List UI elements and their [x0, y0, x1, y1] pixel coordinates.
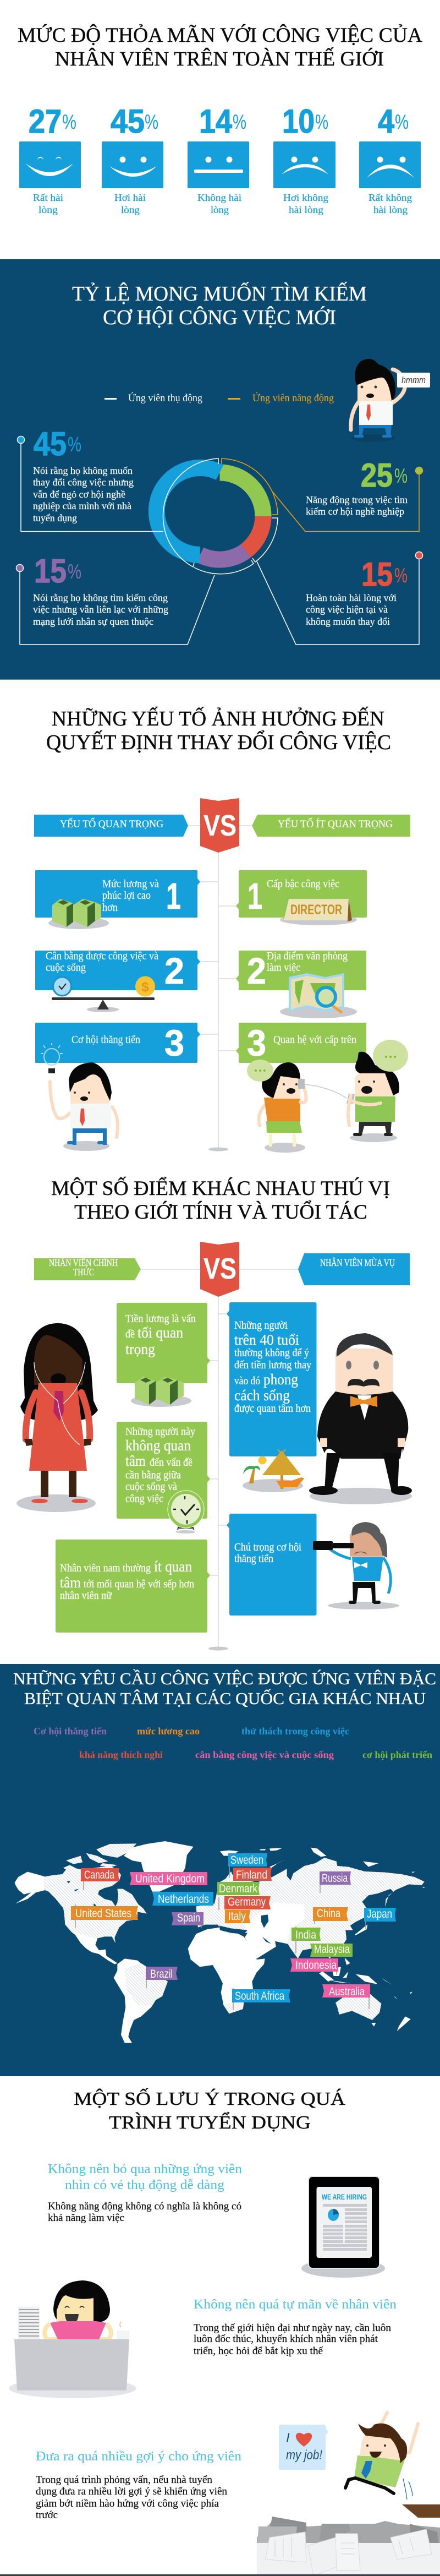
note: complacency: Không nên quá tự mãn về nhân viên: [194, 2297, 397, 2312]
legend: requirements: thử thách trong công việc: [241, 1726, 349, 1737]
icon: speech bubble I love my job: [279, 2425, 328, 2470]
card: men care less about boss: nhân viên nữ: [60, 1590, 112, 1602]
banner: less important factors: YẾU TỐ ÍT QUAN TRỌNG: [278, 818, 393, 830]
flag: India: India: [295, 1929, 316, 1941]
card: not caring about balance: [117, 1422, 210, 1533]
flag: Netherlands: Netherlands: [158, 1893, 209, 1906]
icon: woman with earphones: [16, 1323, 98, 1512]
title: differences: THEO GIỚI TÍNH VÀ TUỔI TÁC: [74, 1200, 367, 1224]
legend: requirements: [34, 1726, 432, 1760]
note: complacency: luôn đốc thúc, khuyến khích nhân viên phát: [194, 2333, 378, 2345]
note: too many hints: giảm bớt niềm hào hứng với công việc phía: [36, 2498, 219, 2509]
callout: 15% satisfied: %: [394, 564, 408, 587]
stat: 10% somewhat unsatisfied: %: [315, 111, 328, 133]
callout: 15% satisfied: 15: [361, 556, 393, 593]
banner: less important factors: [252, 815, 410, 837]
stat: 14% not satisfied: Không hài: [197, 192, 241, 203]
callout: 15% passive network: Nói rằng họ không tìm kiếm công: [33, 592, 168, 603]
legend: requirements: mức lương cao: [137, 1726, 200, 1737]
banner: permanent staff: THỨC: [73, 1266, 94, 1278]
stat: 14% not satisfied: %: [233, 111, 246, 133]
callout: 25% active: 25: [361, 457, 393, 494]
icon: woman at desk: [9, 2280, 136, 2398]
icon: idea man: [41, 1043, 118, 1151]
title: requirements: BIỆT QUAN TÂM TẠI CÁC QUỐC GIA KHÁC NHAU: [24, 1688, 426, 1708]
stat: 10% somewhat unsatisfied: hài lòng: [289, 204, 323, 215]
card: not caring about balance: công việc: [125, 1493, 163, 1505]
callout: 15% passive network: [16, 553, 215, 645]
flag: Spain: [172, 1912, 204, 1925]
flag: Spain: Spain: [177, 1912, 200, 1924]
card: not caring about balance: không quan: [125, 1437, 191, 1454]
flag: Australia: Australia: [329, 1985, 365, 1998]
legend: requirements: cân bằng công việc và cuộc sống: [195, 1749, 334, 1760]
card: over 40: cách sống: [234, 1387, 290, 1404]
card: work life balance: 2: [164, 951, 184, 992]
legend: Ứng viên thụ động: [128, 392, 202, 404]
flag: Sweden: Sweden: [230, 1854, 263, 1866]
card: men care less about boss: tới mối quan hệ với sếp hơn: [84, 1578, 194, 1590]
flag: Denmark: Denmark: [219, 1882, 257, 1895]
callout: 25% active: [273, 457, 422, 532]
icon: VS ribbon: VS: [204, 1252, 237, 1285]
legend: requirements: cơ hội phát triển: [362, 1749, 432, 1760]
note: passive candidates: Không năng động không có nghĩa là không có: [48, 2201, 241, 2212]
card: promotion focus: [227, 1514, 317, 1616]
legend: Ứng viên năng động: [252, 392, 334, 404]
card: office location: Địa điểm văn phòng: [267, 950, 348, 962]
card: job level: Cấp bậc công việc: [267, 878, 339, 890]
card: work life balance: Cân bằng được công việc và: [46, 950, 158, 962]
callout: 15% satisfied: công việc hiện tại và: [306, 604, 388, 615]
card: relationship with boss: 3: [247, 1023, 266, 1064]
card: not caring about balance: tâm: [125, 1453, 146, 1469]
flag: Italy: Italy: [228, 1910, 246, 1923]
title: satisfaction: MỨC ĐỘ THỎA MÃN VỚI CÔNG VIỆC CỦA: [18, 23, 422, 47]
callout: 45% passive: tuyển dụng: [33, 512, 77, 523]
callout: 45% passive: %: [68, 433, 81, 456]
card: salary: phúc lợi cao: [102, 889, 151, 902]
panel: recruitment notes: [0, 2088, 440, 2576]
icon: man with telescope: [313, 1522, 399, 1609]
legend: requirements: Cơ hội thăng tiến: [34, 1726, 107, 1737]
stat: 27% very satisfied: [19, 103, 81, 215]
card: over 40: trên 40 tuổi: [234, 1331, 299, 1348]
icon: tablet hiring: WE ARE HIRING: [322, 2192, 367, 2201]
flag: Malaysia: Malaysia: [314, 1943, 350, 1956]
panel: desire for new job: [0, 259, 440, 680]
icon: tablet hiring: [301, 2176, 385, 2278]
icon: speech bubble I love my job: I: [286, 2431, 290, 2446]
card: work life balance: $: [141, 980, 150, 995]
note: too many hints: Trong quá trình phỏng vấn, nếu nhà tuyển: [36, 2474, 212, 2486]
card: salary most important: trọng: [125, 1341, 155, 1357]
card: office location: 2: [247, 951, 266, 992]
banner: seasonal staff: [298, 1253, 410, 1285]
card: not caring about balance: cần bằng giữa: [125, 1469, 181, 1481]
icon: VS ribbon: [200, 1242, 239, 1297]
callout: 15% satisfied: [257, 552, 422, 645]
card: men care less about boss: tâm: [60, 1574, 81, 1591]
card: salary most important: Tiền lương là vấn: [125, 1313, 196, 1325]
flag: South Africa: South Africa: [235, 1990, 284, 2002]
panel: job requirements by country: [0, 1664, 440, 2076]
stat: 27% very satisfied: 27: [29, 103, 62, 140]
card: promotion: [35, 1023, 200, 1064]
card: over 40: được quan tâm hơn: [234, 1402, 311, 1415]
title: satisfaction: [18, 23, 422, 70]
note: complacency: [194, 2297, 397, 2357]
card: over 40: [227, 1302, 317, 1456]
callout: 45% passive: thay đổi công việc nhưng: [33, 477, 134, 488]
stat: 14% not satisfied: 14: [199, 103, 233, 140]
icon: VS ribbon: VS: [204, 809, 237, 842]
card: salary: 1: [166, 876, 181, 917]
icon: man with mustache: [309, 1333, 412, 1504]
card: promotion: 3: [164, 1023, 184, 1064]
icon: beach: [243, 1449, 304, 1492]
stat: 10% somewhat unsatisfied: [273, 103, 336, 215]
card: men care less about boss: [56, 1540, 210, 1633]
chart: donut: [157, 459, 278, 574]
stat: 10% somewhat unsatisfied: Hơi không: [283, 192, 328, 203]
callout: 15% passive network: 15: [34, 553, 67, 590]
title: factors: QUYẾT ĐỊNH THAY ĐỔI CÔNG VIỆC: [46, 730, 391, 754]
icon: thinking man: [351, 359, 430, 442]
card: salary most important: đề: [125, 1328, 135, 1340]
banner: permanent staff: NHÂN VIÊN CHÍNH: [49, 1257, 118, 1268]
title: recruitment: [74, 2088, 345, 2133]
note: too many hints: dụng đưa ra nhiều lời gợi ý sẽ khiến ứng viên: [36, 2486, 227, 2497]
card: salary: [35, 870, 200, 929]
callout: 15% passive network: %: [68, 560, 81, 583]
callout: 15% satisfied: Hoàn toàn hài lòng với: [306, 592, 397, 603]
stat: 45% somewhat satisfied: %: [145, 111, 158, 133]
map flags: [71, 1853, 396, 2010]
panel: job satisfaction: [18, 23, 422, 215]
banner: permanent staff: [34, 1257, 141, 1280]
title: differences: [51, 1176, 390, 1224]
note: complacency: Trong thế giới hiện đại như ngày nay, cần luôn: [194, 2322, 391, 2334]
stat: 27% very satisfied: lòng: [38, 204, 58, 215]
icon: paper pile: [257, 2517, 440, 2576]
flag: Russia: Russia: [322, 1872, 348, 1885]
note: passive candidates: khả năng làm việc: [48, 2212, 124, 2224]
banner: important factors: [34, 815, 188, 837]
icon: two people talking: [247, 1040, 408, 1153]
flag: United Kingdom: United Kingdom: [135, 1873, 205, 1885]
card: not caring about balance: đến vấn đề: [150, 1456, 193, 1469]
flag: Canada: Canada: [84, 1869, 114, 1881]
chart: world map: [15, 1841, 425, 2043]
stat: 14% not satisfied: lòng: [211, 204, 229, 215]
card: over 40: thường không để ý: [234, 1347, 309, 1359]
callout: 45% passive: [18, 425, 163, 532]
callout: 15% passive network: việc nhưng vẫn liên lạc với những: [33, 604, 168, 615]
card: office location: [236, 950, 366, 1018]
flag: Japan: Japan: [367, 1908, 392, 1920]
card: over 40: vào đó: [234, 1375, 260, 1387]
title: factors: NHỮNG YẾU TỐ ẢNH HƯỞNG ĐẾN: [52, 706, 384, 730]
icon: VS ribbon: [200, 798, 239, 853]
card: job level: DIRECTOR: [290, 902, 342, 918]
stat: 4% very unsatisfied: 4: [378, 103, 395, 140]
icon: thinking man: hmmm: [402, 375, 426, 385]
stat: 27% very satisfied: %: [62, 111, 76, 133]
card: salary: hơn: [102, 902, 118, 914]
title: recruitment: MỘT SỐ LƯU Ý TRONG QUÁ: [74, 2088, 345, 2109]
card: promotion focus: thăng tiến: [234, 1553, 273, 1565]
title: recruitment: TRÌNH TUYỂN DỤNG: [109, 2112, 311, 2133]
card: over 40: đến tiền lương thay: [234, 1359, 311, 1371]
icon: speech bubble I love my job: my job!: [286, 2448, 322, 2463]
card: salary most important: [117, 1303, 210, 1407]
stat: 14% not satisfied: [188, 103, 249, 215]
stat: 45% somewhat satisfied: lòng: [121, 204, 140, 215]
note: passive candidates: [48, 2162, 242, 2224]
callout: 15% passive network: mạng lưới nhân sự quen thuộc: [33, 616, 153, 627]
callout: 25% active: %: [394, 465, 408, 487]
card: promotion: Cơ hội thăng tiến: [72, 1034, 140, 1046]
legend: [105, 392, 334, 404]
stat: 4% very unsatisfied: [359, 103, 421, 215]
stat: 10% somewhat unsatisfied: 10: [282, 103, 315, 140]
flag: Finland: Finland: [236, 1869, 267, 1881]
title: differences: MỘT SỐ ĐIỂM KHÁC NHAU THÚ VỊ: [51, 1176, 390, 1200]
card: office location: làm việc: [267, 962, 300, 974]
banner: seasonal staff: NHÂN VIÊN MÙA VỤ: [320, 1257, 395, 1268]
title: factors: [46, 706, 391, 754]
card: work life balance: [35, 950, 200, 1012]
flag: Germany: Germany: [228, 1896, 266, 1908]
note: too many hints: Đưa ra quá nhiều gợi ý cho ứng viên: [36, 2449, 241, 2464]
card: men care less about boss: Nhân viên nam thường: [60, 1562, 151, 1574]
title: satisfaction: NHÂN VIÊN TRÊN TOÀN THẾ GIỚI: [55, 47, 384, 70]
legend: requirements: khả năng thích nghi: [79, 1749, 163, 1760]
card: not caring about balance: Những người này: [125, 1426, 195, 1438]
stat: 45% somewhat satisfied: 45: [111, 103, 145, 140]
card: relationship with boss: [236, 1023, 366, 1064]
stat: 27% very satisfied: Rất hài: [33, 192, 63, 203]
callout: 25% active: Năng động trong việc tìm: [306, 494, 408, 505]
note: passive candidates: Không nên bỏ qua những ứng viên: [48, 2162, 242, 2176]
flag: United States: United States: [75, 1907, 131, 1920]
icon: jumping man: [345, 2413, 418, 2499]
card: relationship with boss: Quan hệ với cấp trên: [273, 1034, 356, 1046]
card: over 40: Những người: [234, 1319, 288, 1331]
icon: desk plank: [402, 2504, 440, 2518]
callout: 15% satisfied: không muốn thay đổi: [306, 616, 390, 627]
note: passive candidates: nhìn có vẻ thụ động dễ dàng: [65, 2178, 224, 2192]
banner: important factors: YẾU TỐ QUAN TRỌNG: [60, 818, 163, 830]
panel: gender and age differences: [16, 1176, 412, 1650]
card: over 40: phong: [263, 1371, 298, 1388]
callout: 45% passive: nghiệp của mình với nhà: [33, 500, 131, 511]
card: job level: 1: [248, 876, 262, 917]
callout: 45% passive: Nói rằng họ không muốn: [33, 465, 133, 476]
title: requirements: [13, 1669, 436, 1708]
note: complacency: triển, học hỏi để bắt kịp xu thế: [194, 2345, 323, 2357]
card: not caring about balance: cuộc sống và: [125, 1481, 177, 1493]
callout: 45% passive: 45: [34, 425, 67, 462]
flag: Brazil: Brazil: [150, 1968, 173, 1980]
note: too many hints: trước: [36, 2509, 58, 2521]
stat: 45% somewhat satisfied: Hơi hài: [114, 192, 146, 203]
stat: 4% very unsatisfied: Rất không: [369, 192, 412, 203]
card: salary: Mức lương và: [102, 878, 159, 890]
title: job seeking: TỶ LỆ MONG MUỐN TÌM KIẾM: [72, 281, 367, 305]
callout: 45% passive: vẫn để ngỏ cơ hội nghề: [33, 489, 125, 500]
title: requirements: NHỮNG YÊU CẦU CÔNG VIỆC ĐƯỢC ỨNG VIÊN ĐẶC: [13, 1669, 436, 1688]
note: too many hints: [36, 2449, 241, 2521]
callout: 25% active: kiếm cơ hội nghề nghiệp: [306, 506, 404, 517]
stat: 45% somewhat satisfied: [102, 103, 163, 215]
panel: factors influencing job change: [34, 706, 410, 1153]
card: work life balance: cuộc sống: [46, 962, 86, 974]
title: job seeking: CƠ HỘI CÔNG VIỆC MỚI: [103, 306, 336, 329]
card: salary most important: tối quan: [138, 1324, 183, 1341]
stat: 4% very unsatisfied: %: [395, 111, 409, 133]
card: job level: [236, 870, 367, 925]
title: job seeking: [72, 281, 367, 329]
flag: Indonesia: Indonesia: [295, 1959, 337, 1972]
flag: China: China: [317, 1907, 340, 1920]
stat: 4% very unsatisfied: hài lòng: [373, 204, 408, 215]
card: promotion focus: Chú trọng cơ hội: [234, 1541, 301, 1553]
card: men care less about boss: ít quan: [154, 1558, 192, 1575]
